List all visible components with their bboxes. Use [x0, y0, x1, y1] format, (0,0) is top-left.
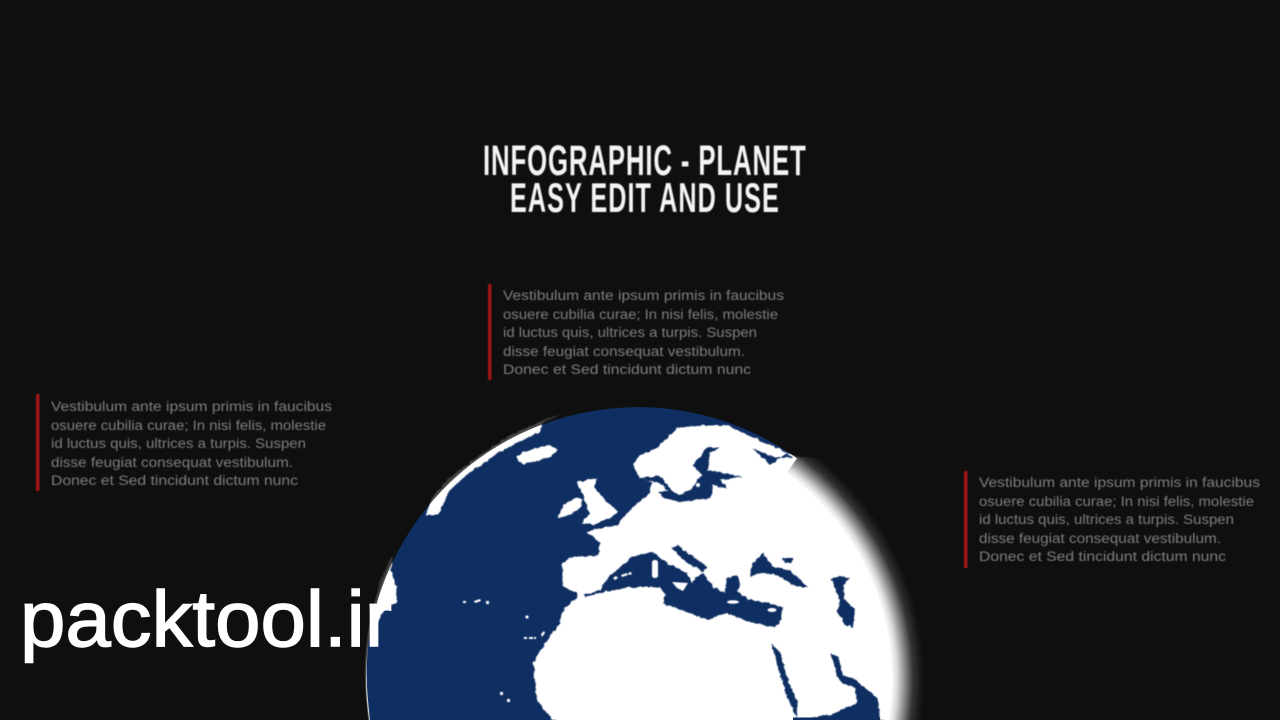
text block: left: Vestibulum ante ipsum primis in faucibus — [51, 399, 332, 414]
sea: White Sea — [752, 448, 793, 465]
text block: center: Vestibulum ante ipsum primis in faucibus — [503, 288, 784, 303]
text block: left — [36, 394, 332, 491]
text block: left: disse feugiat consequat vestibulum. — [51, 455, 293, 470]
limb highlight — [366, 557, 392, 720]
text block: center: osuere cubilia curae; In nisi felis, molestie — [503, 307, 778, 322]
title: INFOGRAPHIC - PLANET — [483, 136, 806, 185]
island: Canaries — [524, 631, 545, 639]
bottom edge of Africa and Arabia — [556, 718, 917, 720]
landmass: Europe, Africa and Asia — [533, 425, 930, 720]
text block: center: Donec et Sed tincidunt dictum nunc — [503, 362, 751, 377]
sea: Persian Gulf and Arabian Sea — [796, 653, 880, 720]
island: Cape Verde — [500, 692, 510, 702]
text block: right: Vestibulum ante ipsum primis in faucibus — [979, 475, 1260, 490]
text block: left: Donec et Sed tincidunt dictum nunc — [51, 473, 298, 488]
text block: center: id luctus quis, ultrices a turpis. Suspen — [503, 325, 757, 340]
globe — [366, 407, 930, 720]
title: EASY EDIT AND USE — [510, 176, 779, 222]
text block: right: id luctus quis, ultrices a turpis. Suspen — [979, 512, 1234, 527]
sea: Baltic and Skagerrak — [640, 447, 743, 502]
island: Sicily — [672, 582, 688, 591]
island: Azores — [463, 599, 489, 604]
land: American coast at limb — [374, 557, 397, 625]
sea: Black Sea — [750, 553, 808, 588]
sea: Caspian — [831, 576, 855, 627]
sea: Azov — [782, 557, 793, 563]
text block: right — [964, 471, 1260, 568]
small islands — [463, 483, 776, 702]
title — [483, 136, 806, 222]
island: Ireland — [558, 497, 583, 518]
sea: Mediterranean — [583, 552, 783, 627]
text block: left: osuere cubilia curae; In nisi felis, molestie — [51, 418, 326, 433]
island: Cyprus — [768, 608, 776, 612]
text block: right: Donec et Sed tincidunt dictum nunc — [979, 549, 1226, 564]
island: Balearics — [613, 572, 632, 580]
watermark: packtool.ir — [20, 574, 392, 663]
island: Crete — [727, 600, 739, 604]
ocean — [366, 407, 910, 720]
island: Great Britain — [577, 478, 618, 525]
island: Greenland — [426, 413, 563, 515]
island: Madeira — [525, 615, 529, 619]
text block: right: osuere cubilia curae; In nisi felis, molestie — [979, 494, 1254, 509]
text block: center: disse feugiat consequat vestibulum. — [503, 344, 745, 359]
infographic canvas — [24, 144, 1260, 720]
island: Iceland — [517, 445, 557, 464]
island: Sardinia and Corsica — [652, 560, 658, 578]
sea: Adriatic — [672, 545, 707, 572]
sea: Red Sea — [771, 643, 798, 718]
island: Gotland — [696, 483, 700, 487]
text block: left: id luctus quis, ultrices a turpis. Suspen — [51, 436, 306, 451]
bottom edge of Arabian Sea — [793, 718, 880, 720]
continents and seas — [374, 413, 930, 720]
text block: right: disse feugiat consequat vestibulum. — [979, 531, 1221, 546]
text block: center — [488, 284, 784, 380]
